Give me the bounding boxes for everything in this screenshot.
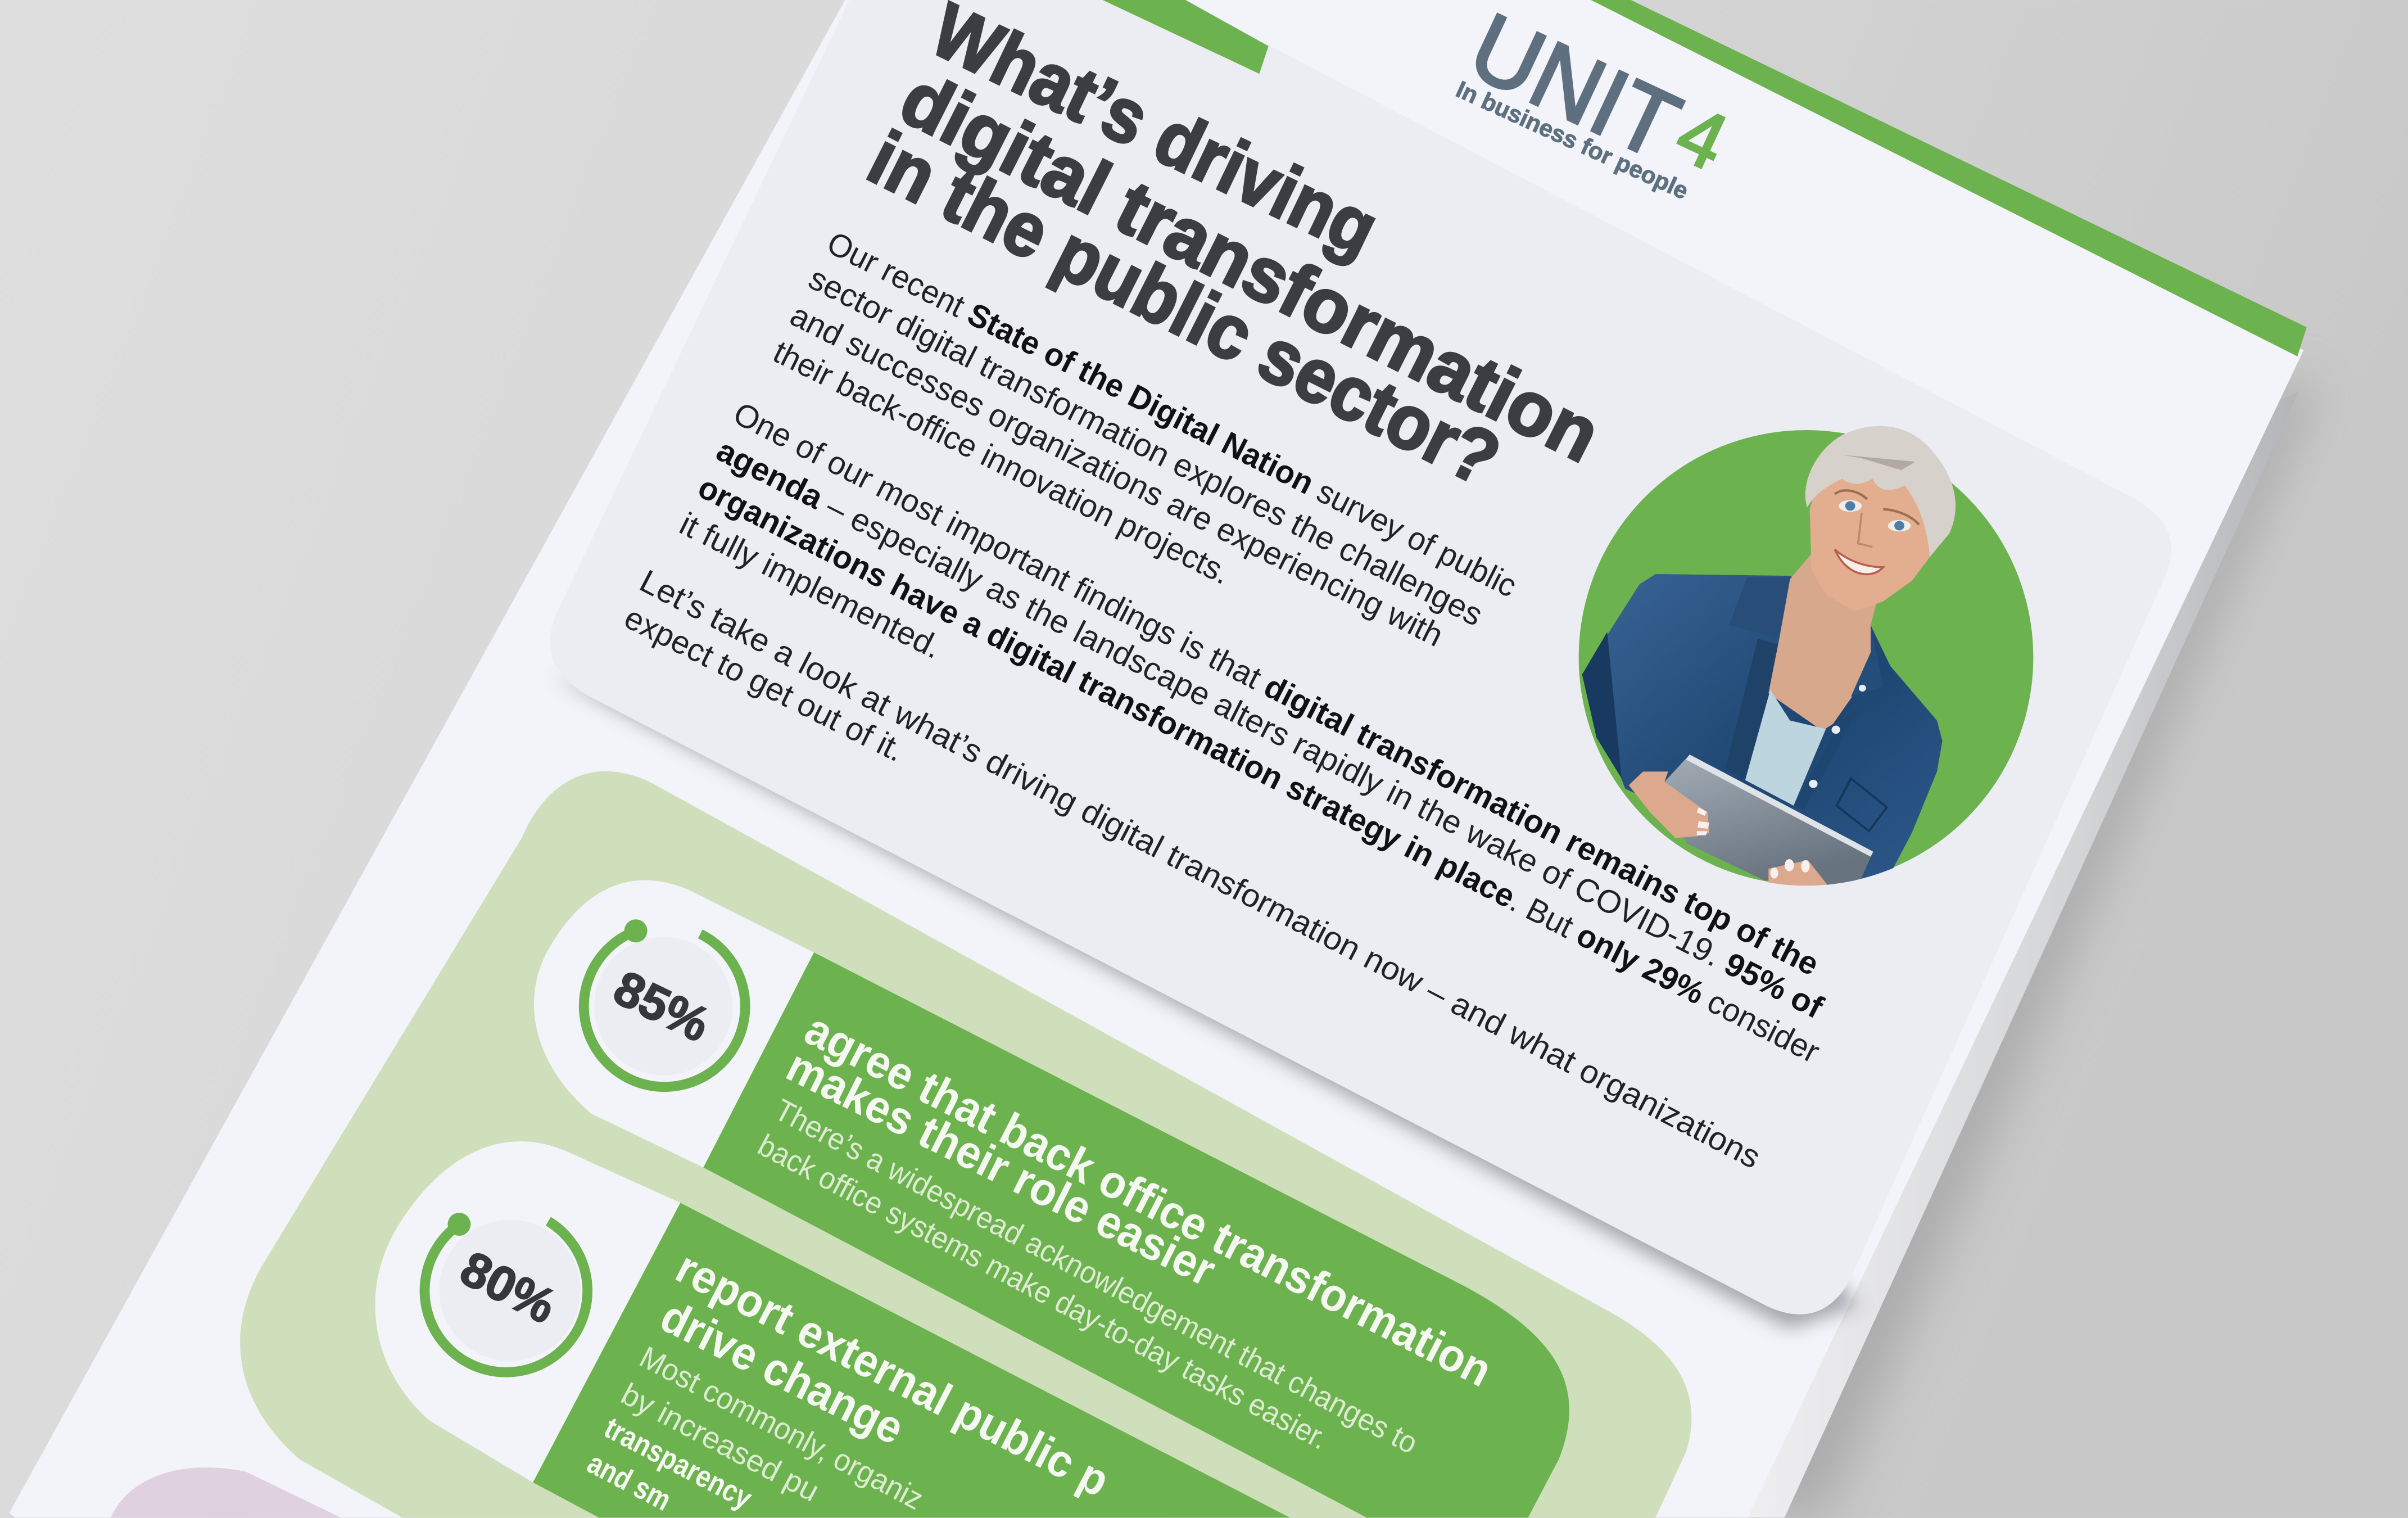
statistic text 1: There’s a widespread acknowledgement that changes to [770, 1092, 1423, 1461]
logo: Unit4: 4 [1663, 88, 1740, 188]
statistic text 1: back office systems make day-to-day tasks easier. [753, 1128, 1333, 1456]
intro paragraph 3: Let’s take a look at what’s driving digital transformation now – and what organizations [634, 563, 1766, 1176]
green top stripe right [1591, 0, 2307, 356]
statistic text 2: drive change [653, 1290, 912, 1454]
panel: purple next section [111, 1467, 341, 1517]
intro paragraph 2: it fully implemented. [674, 506, 947, 666]
green top stripe left [1103, 0, 1269, 74]
donut gauge 85%: 85% [605, 960, 718, 1052]
donut gauge 85% [584, 919, 745, 1087]
statistic row 1 [534, 880, 1569, 1517]
illustrated person [1582, 426, 1956, 891]
panel: light green statistics background [240, 771, 1691, 1517]
statistic text 1: agree that back office transformation [797, 1004, 1500, 1397]
statistic row 2 [375, 1141, 1290, 1517]
statistic text 2: by increased pu [615, 1376, 825, 1508]
intro paragraph 1: Our recent State of the Digital Nation survey of public [821, 225, 1522, 604]
intro paragraph 2: organizations have a digital transformation strategy in place. But only 29% consider [692, 469, 1825, 1070]
green bar 1 [703, 952, 1569, 1517]
intro paragraph 2: One of our most important findings is that digital transformation remains top of the [728, 395, 1825, 983]
statistic text 2: report external public p [668, 1241, 1117, 1507]
green circle [1579, 430, 2033, 885]
donut gauge 80%: 80% [452, 1240, 565, 1334]
white pill 1 [534, 880, 814, 1167]
intro paragraph 2: agenda – especially as the landscape alters rapidly in the wake of COVID-19. 95% of [711, 432, 1829, 1026]
title: digital transformation [888, 55, 1614, 478]
white pill 2 [375, 1141, 680, 1483]
intro paragraph 1: sector digital transformation explores the challenges [803, 260, 1488, 633]
intro paragraph 1: and successes organizations are experiencing with [785, 297, 1449, 654]
logo: Unit4: In business for people [1452, 76, 1692, 204]
title: in the public sector? [856, 114, 1513, 503]
green bar 2 [533, 1203, 1290, 1517]
statistic text 1: makes their role easier [778, 1040, 1224, 1296]
donut gauge 80% [425, 1213, 587, 1372]
intro paragraph 1: their back-office innovation projects. [768, 334, 1236, 591]
intro paragraph 3: expect to get out of it. [619, 599, 909, 769]
photo: woman holding tablet on green circle [1579, 426, 2033, 891]
intro panel [550, 0, 2171, 1329]
